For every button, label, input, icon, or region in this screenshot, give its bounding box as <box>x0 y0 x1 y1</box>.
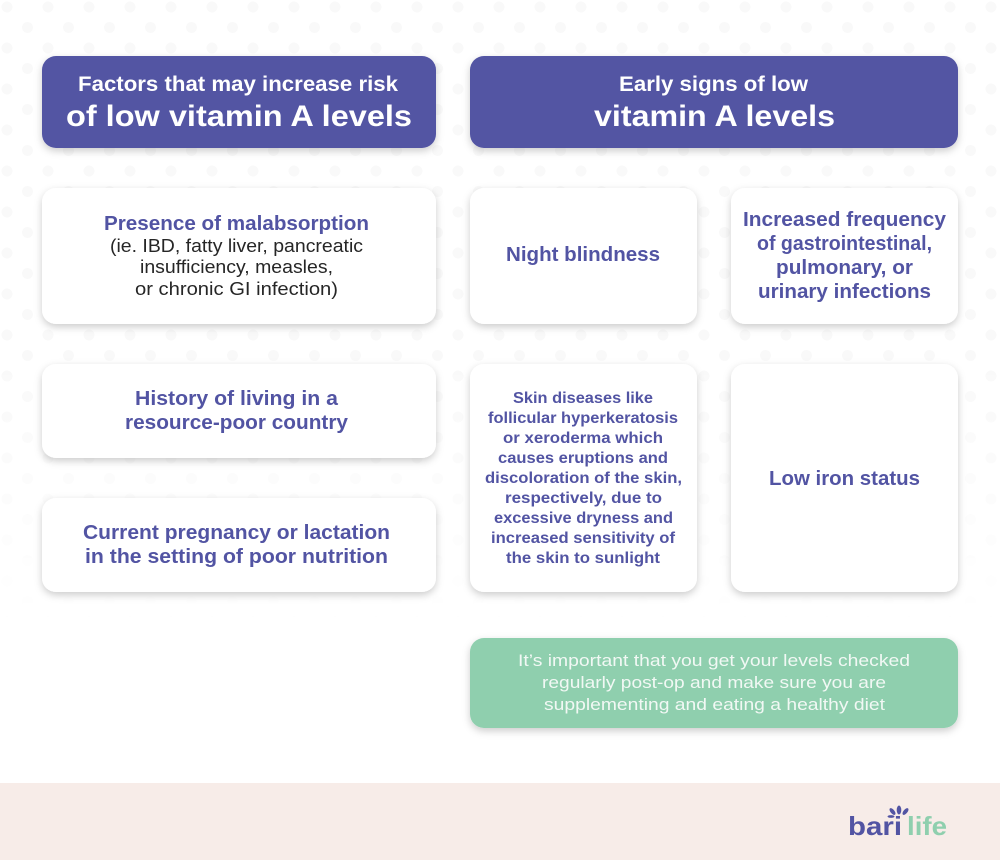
card: malabsorption: insufficiency, measles, <box>140 257 333 277</box>
callout: get levels checked: supplementing and eating a healthy diet <box>544 695 885 714</box>
card: resource-poor country <box>42 364 436 458</box>
card: increased infections: Increased frequency <box>743 209 947 231</box>
callout: get levels checked: It’s important that you get your levels checked <box>518 651 910 670</box>
header: risk factors <box>42 56 436 148</box>
card: night blindness: Night blindness <box>506 244 660 266</box>
logo: barilife <box>848 806 947 841</box>
card: skin diseases: follicular hyperkeratosis <box>488 410 678 427</box>
callout: get levels checked <box>470 638 958 728</box>
callout: get levels checked: regularly post-op and make sure you are <box>542 673 886 692</box>
header: risk factors: Factors that may increase risk <box>78 73 398 96</box>
card: night blindness <box>470 188 697 324</box>
card: skin diseases: the skin to sunlight <box>506 550 661 567</box>
card: resource-poor country: resource-poor country <box>125 412 349 434</box>
card: malabsorption <box>42 188 436 324</box>
card: low iron status <box>731 364 958 592</box>
card: increased infections: of gastrointestinal, <box>757 233 932 255</box>
card: increased infections <box>731 188 958 324</box>
card: pregnancy or lactation: Current pregnancy or lactation <box>83 522 390 544</box>
card: resource-poor country: History of living in a <box>135 388 339 410</box>
card: low iron status: Low iron status <box>769 468 920 490</box>
card: skin diseases: excessive dryness and <box>494 510 673 527</box>
logo: barilife: life <box>907 811 947 841</box>
header: early signs <box>470 56 958 148</box>
header: early signs: vitamin A levels <box>594 100 835 133</box>
card: skin diseases <box>470 364 697 592</box>
logo: barilife: bari <box>848 811 902 841</box>
icon: flower petals <box>888 806 910 818</box>
card: increased infections: pulmonary, or <box>776 257 913 279</box>
card: malabsorption: Presence of malabsorption <box>104 213 369 235</box>
footer band <box>0 783 1000 860</box>
card: malabsorption: (ie. IBD, fatty liver, pancreatic <box>110 236 363 256</box>
card: malabsorption: or chronic GI infection) <box>135 279 338 299</box>
card: pregnancy or lactation <box>42 498 436 592</box>
header: early signs: Early signs of low <box>619 73 809 96</box>
card: pregnancy or lactation: in the setting of poor nutrition <box>85 546 388 568</box>
card: skin diseases: or xeroderma which <box>503 430 663 447</box>
card: skin diseases: discoloration of the skin, <box>485 470 682 487</box>
card: increased infections: urinary infections <box>758 281 931 303</box>
card: skin diseases: increased sensitivity of <box>491 530 676 547</box>
card: skin diseases: respectively, due to <box>505 490 662 507</box>
card: skin diseases: Skin diseases like <box>513 390 653 407</box>
card: skin diseases: causes eruptions and <box>498 450 668 467</box>
header: risk factors: of low vitamin A levels <box>66 100 412 133</box>
